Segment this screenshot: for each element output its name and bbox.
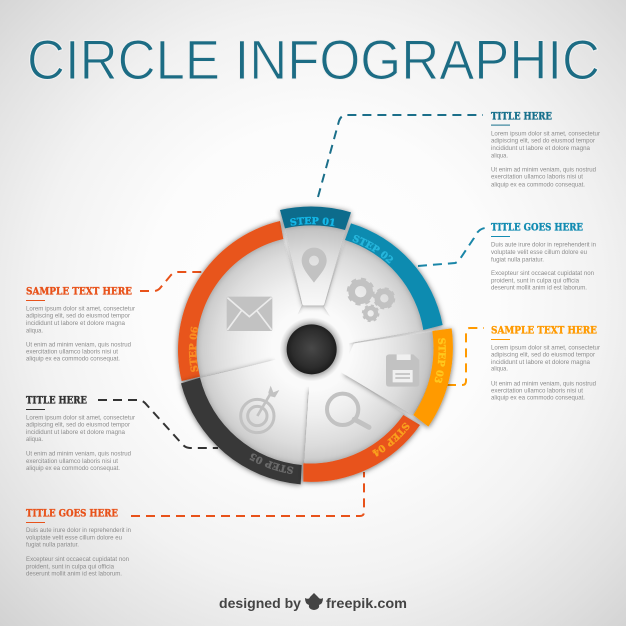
body text	[26, 527, 131, 577]
panel: step 05	[178, 358, 309, 488]
body text: Excepteur sint occaecat cupidatat non	[26, 556, 129, 563]
heading: TITLE GOES HERE	[26, 508, 118, 519]
dark ball	[287, 324, 337, 374]
heading: TITLE HERE	[26, 396, 87, 407]
icon: location pin	[302, 248, 327, 283]
text block: sample text here (amber)	[491, 325, 601, 402]
sector: step 02	[326, 242, 422, 342]
body text: aliquip ex ea commodo consequat.	[26, 465, 120, 472]
body text: aliquip ex ea commodo consequat.	[26, 356, 120, 363]
body text: adipiscing elit, sed do eiusmod tempor	[491, 138, 596, 145]
text block: title here (teal)	[491, 112, 601, 188]
label: step 03: STEP 03	[434, 338, 446, 383]
body text: adipiscing elit, sed do eiusmod tempor	[26, 313, 131, 320]
body text: adipiscing elit, sed do eiusmod tempor	[491, 352, 596, 359]
body text: aliqua.	[491, 366, 508, 373]
panel: step 06	[174, 218, 304, 384]
base disc	[267, 304, 357, 394]
heading: TITLE GOES HERE	[491, 222, 583, 233]
icon: target with arrow	[241, 386, 279, 433]
connector: step 03 to sample text here	[447, 328, 484, 385]
heading: TITLE HERE	[491, 112, 552, 123]
body text: Ut enim ad minim veniam, quis nostrud	[491, 166, 596, 173]
text block: title goes here (blue)	[491, 222, 596, 292]
body text: aliquip ex ea commodo consequat.	[491, 395, 585, 402]
connector: step 04 to title goes here	[131, 472, 364, 516]
label: step 04: STEP 04	[372, 422, 410, 457]
heading: SAMPLE TEXT HERE	[491, 325, 597, 336]
connector: step 05 to title here	[98, 400, 218, 448]
sector: step 04	[306, 374, 403, 462]
panel: step 02	[322, 220, 446, 346]
body text: Excepteur sint occaecat cupidatat non	[491, 270, 594, 277]
footer credit: designed by	[219, 595, 301, 611]
body text: aliqua.	[491, 152, 508, 159]
body text: voluptate velit esse cillum dolore eu	[26, 534, 122, 541]
connector: step 01 to title here	[318, 115, 483, 197]
body text: incididunt ut labore et dolore magna	[491, 359, 590, 366]
sector: step 06	[198, 241, 300, 375]
body text: voluptate velit esse cillum dolore eu	[491, 249, 587, 256]
body text: Lorem ipsum dolor sit amet, consectetur	[491, 131, 601, 138]
icon: gears	[348, 279, 394, 321]
body text	[26, 414, 136, 472]
body text: Ut enim ad minim veniam, quis nostrud	[26, 451, 131, 458]
body text: fugiat nulla pariatur.	[26, 542, 79, 549]
hub	[274, 312, 349, 387]
body text: incididunt ut labore et dolore magna	[26, 320, 125, 327]
body text: Ut enim ad minim veniam, quis nostrud	[26, 341, 131, 348]
text block: sample text here (orange)	[26, 286, 136, 363]
body text: Lorem ipsum dolor sit amet, consectetur	[491, 345, 601, 352]
body text: incididunt ut labore et dolore magna	[26, 429, 125, 436]
body text: Ut enim ad minim veniam, quis nostrud	[491, 380, 596, 387]
band: step 02	[345, 223, 443, 330]
body text: exercitation ullamco laboris nisi ut	[491, 174, 583, 181]
body text: aliqua.	[26, 327, 43, 334]
band: step 04	[303, 415, 420, 482]
body text: Duis aute irure dolor in reprehenderit in	[491, 241, 596, 248]
body text: aliqua.	[26, 436, 43, 443]
body text	[26, 306, 136, 363]
panel: step 03	[342, 326, 457, 430]
panel: step 01	[276, 203, 354, 310]
icon: freepik logo	[305, 593, 323, 610]
panel: step 04	[300, 378, 422, 486]
sector: step 03	[343, 333, 432, 412]
body text: exercitation ullamco laboris nisi ut	[26, 458, 118, 465]
band: step 01	[280, 207, 351, 230]
halo around hub	[268, 305, 356, 393]
body text	[491, 345, 601, 402]
icon: floppy disk	[386, 354, 419, 387]
body text: fugiat nulla pariatur.	[491, 256, 544, 263]
body text: proident, sunt in culpa qui officia	[26, 563, 114, 570]
connector: step 06 to sample text here	[140, 272, 203, 291]
body text: deserunt mollit anim id est laborum.	[491, 285, 587, 292]
text block: title here (dark)	[26, 396, 136, 472]
footer credit	[219, 593, 407, 611]
body text: aliquip ex ea commodo consequat.	[491, 181, 585, 188]
body text: exercitation ullamco laboris nisi ut	[491, 388, 583, 395]
circle diagram	[174, 203, 457, 488]
body text: proident, sunt in culpa qui officia	[491, 278, 579, 285]
body text: Lorem ipsum dolor sit amet, consectetur	[26, 306, 136, 313]
band: step 03	[413, 328, 453, 427]
body text: deserunt mollit anim id est laborum.	[26, 570, 122, 577]
footer credit: freepik.com	[326, 595, 407, 611]
label: step 02: STEP 02	[352, 235, 394, 264]
icon: magnifying glass	[327, 394, 369, 427]
band: step 05	[181, 378, 302, 484]
label: step 06: STEP 06	[188, 326, 198, 372]
sector: step 05	[202, 362, 307, 463]
connector: step 02 to title goes here	[418, 228, 485, 266]
label: step 01: STEP 01	[290, 216, 334, 226]
heading: SAMPLE TEXT HERE	[26, 286, 132, 297]
title: CIRCLE INFOGRAPHIC	[27, 28, 600, 91]
body text	[491, 241, 596, 292]
icon: envelope	[227, 297, 272, 331]
body text: Lorem ipsum dolor sit amet, consectetur	[26, 414, 136, 421]
body text	[491, 131, 601, 188]
body text: exercitation ullamco laboris nisi ut	[26, 349, 118, 356]
body text: incididunt ut labore et dolore magna	[491, 145, 590, 152]
body text: Duis aute irure dolor in reprehenderit in	[26, 527, 131, 534]
band: step 06	[178, 221, 283, 381]
label: step 05: STEP 05	[250, 454, 294, 474]
body text: adipiscing elit, sed do eiusmod tempor	[26, 422, 131, 429]
text block: title goes here (orange)	[26, 508, 131, 577]
sector: step 01	[287, 226, 343, 304]
